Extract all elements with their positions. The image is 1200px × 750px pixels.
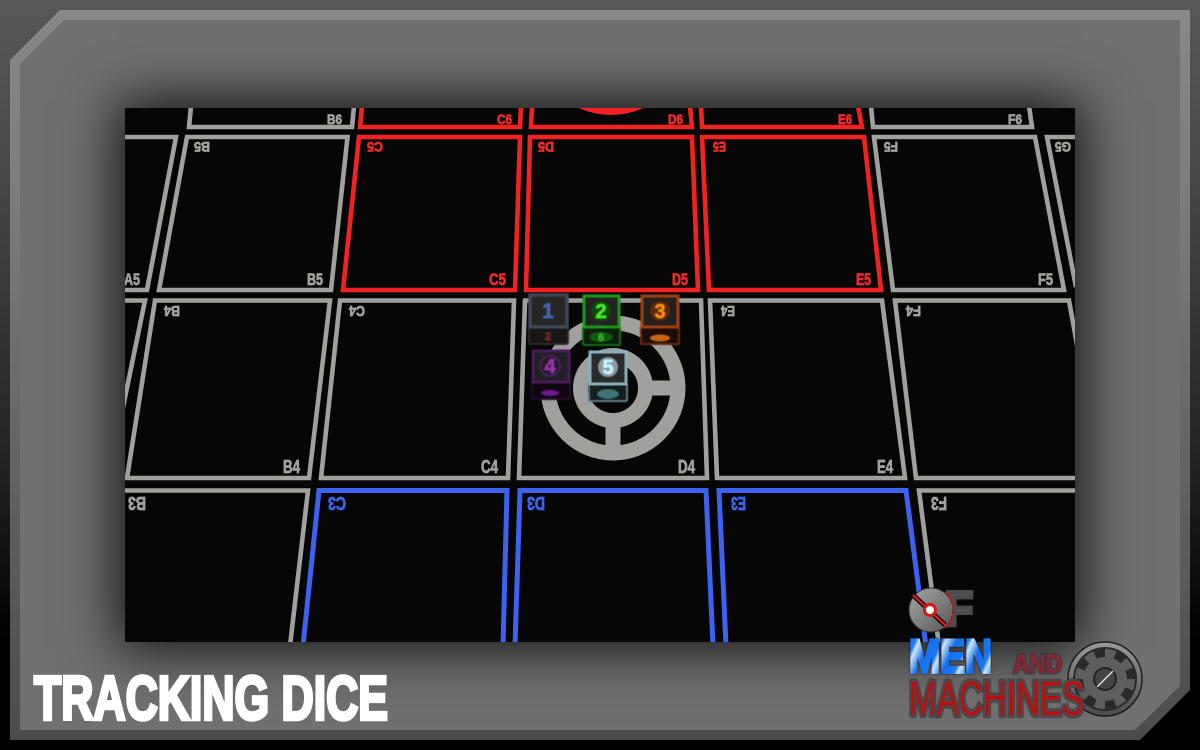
centre target — [548, 323, 681, 458]
square labels: B4 — [283, 456, 301, 477]
row 3 squares — [120, 490, 1080, 646]
die 4 — [532, 351, 570, 399]
square labels: B6 — [327, 111, 342, 127]
square labels: C5 — [367, 139, 383, 155]
square labels: D5 — [672, 271, 688, 289]
square labels: F6 — [1008, 111, 1022, 127]
game board screenshot — [125, 108, 1075, 642]
square labels: E3 — [731, 493, 746, 513]
square labels: F5 — [884, 139, 898, 155]
square labels: D3 — [527, 493, 545, 513]
square labels: G5 — [1055, 139, 1071, 155]
square labels: F4 — [905, 302, 921, 319]
square labels — [124, 111, 1071, 513]
die 4: 4 — [544, 356, 556, 378]
logo circle O with red slash — [909, 588, 954, 632]
row 5 squares — [120, 137, 1080, 290]
square labels: B5 — [194, 139, 210, 155]
row 4 squares — [120, 300, 1080, 478]
square labels: F5 — [1038, 271, 1053, 289]
die 3 — [641, 296, 679, 344]
tracking dice — [529, 295, 679, 401]
die 1: 2 — [545, 331, 551, 343]
square labels: D4 — [678, 456, 696, 477]
die 5 — [589, 352, 627, 401]
square labels: E6 — [838, 111, 852, 127]
logo word AND: AND — [1013, 649, 1062, 679]
die 2 — [583, 296, 620, 345]
square labels: C6 — [497, 111, 512, 127]
row 6 squares — [189, 0, 1032, 127]
square labels: F3 — [931, 493, 947, 513]
square labels: D6 — [668, 111, 683, 127]
die 2: 2 — [595, 301, 607, 323]
square labels: C4 — [481, 456, 499, 477]
title: TRACKING DICE — [34, 664, 388, 734]
board drop shadow — [125, 108, 1075, 642]
square labels: D5 — [538, 139, 554, 155]
logo letter F: F — [945, 583, 973, 636]
logo word MACHINES: MACHINES — [909, 673, 1084, 726]
logo gear — [1068, 642, 1142, 716]
square labels: E4 — [721, 302, 735, 319]
die 1: 1 — [542, 300, 554, 323]
die 3: 3 — [654, 301, 666, 323]
square labels: C3 — [328, 493, 346, 513]
square labels: B5 — [307, 271, 323, 289]
square labels: B4 — [163, 302, 180, 319]
die 5: 5 — [602, 357, 614, 379]
die 2: 6 — [598, 332, 604, 344]
square labels: E5 — [856, 271, 871, 289]
square labels: C5 — [489, 271, 506, 289]
die 1 — [529, 295, 568, 344]
logo: Of Men and Machines — [909, 583, 1142, 726]
square labels: E4 — [877, 456, 893, 477]
logo word MEN: MEN — [909, 630, 992, 682]
square labels: E5 — [713, 139, 726, 155]
square labels: C4 — [348, 302, 365, 319]
